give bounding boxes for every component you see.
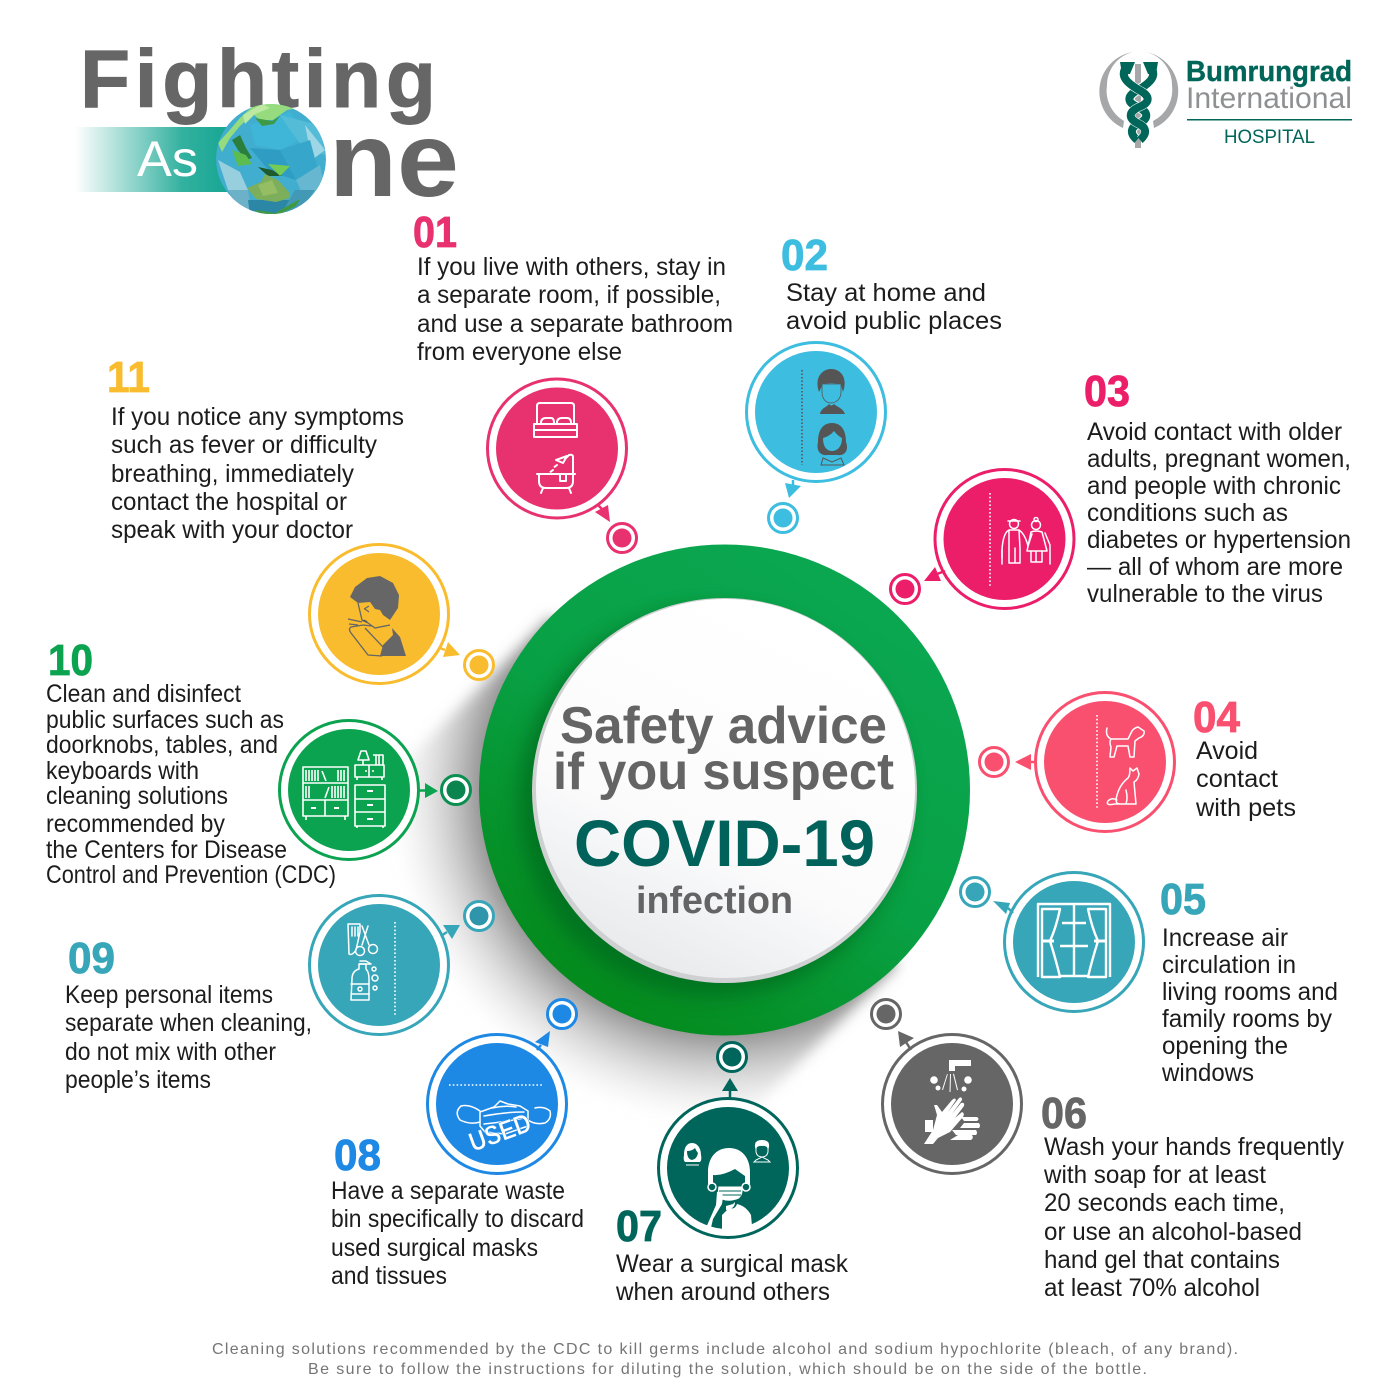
divider bbox=[1096, 715, 1098, 808]
bubble 02 bbox=[746, 342, 886, 482]
node 05 bbox=[960, 878, 990, 906]
text 11 bbox=[111, 403, 404, 544]
icon: coughing boy bbox=[348, 576, 406, 656]
label: USED: USED bbox=[465, 1108, 535, 1158]
logo: Bumrungrad International Hospital: HOSPITAL bbox=[1224, 127, 1315, 148]
node 10 bbox=[442, 776, 470, 804]
text 06: with soap for at least bbox=[1043, 1161, 1266, 1189]
center heading: if you suspect bbox=[553, 743, 894, 801]
text 05 bbox=[1161, 924, 1338, 1087]
divider bbox=[394, 922, 396, 1016]
text 07: when around others bbox=[615, 1278, 830, 1306]
number 05: 05 bbox=[1160, 875, 1206, 924]
text 05: windows bbox=[1161, 1059, 1254, 1087]
text 06: or use an alcohol-based bbox=[1044, 1218, 1302, 1246]
icon: comb and scissors bbox=[348, 924, 378, 956]
text 11: such as fever or difficulty bbox=[111, 431, 377, 459]
arrow 04 bbox=[1015, 754, 1036, 770]
item 07: surgical mask bbox=[615, 1042, 848, 1306]
arrow 09 bbox=[441, 925, 460, 939]
text 09: separate when cleaning, bbox=[65, 1009, 312, 1037]
bubble 08 bbox=[428, 1034, 566, 1174]
icon: man bbox=[817, 369, 845, 414]
logo: Bumrungrad International Hospital: International bbox=[1186, 82, 1352, 115]
text 11: breathing, immediately bbox=[111, 460, 354, 488]
arrow 03 bbox=[924, 567, 945, 581]
number 01: 01 bbox=[413, 208, 457, 257]
arrow 10 bbox=[419, 783, 438, 798]
text 05: family rooms by bbox=[1162, 1005, 1332, 1033]
text 04 bbox=[1195, 737, 1296, 822]
number 06: 06 bbox=[1041, 1089, 1087, 1138]
node 02 bbox=[768, 504, 798, 532]
item 01: separate room bbox=[413, 208, 733, 552]
text 11: If you notice any symptoms bbox=[111, 403, 404, 431]
footnote: Cleaning solutions recommended by the CDC to kill germs include alcohol and sodium hypochlorite (bleach, of any brand). bbox=[212, 1341, 1238, 1358]
icon: used mask bbox=[457, 1101, 550, 1134]
text 01: from everyone else bbox=[417, 338, 622, 366]
item 04: avoid pets bbox=[980, 692, 1296, 832]
icon: drawers bbox=[355, 785, 385, 828]
number 08: 08 bbox=[334, 1131, 381, 1180]
text 10: cleaning solutions bbox=[46, 782, 228, 810]
icon: dog bbox=[1106, 727, 1144, 757]
number 04: 04 bbox=[1193, 693, 1240, 742]
node 11 bbox=[464, 650, 494, 680]
divider bbox=[801, 370, 803, 465]
item 03: avoid vulnerable contact bbox=[890, 367, 1351, 608]
text 05: opening the bbox=[1162, 1032, 1288, 1060]
text 08: Have a separate waste bbox=[331, 1177, 565, 1205]
text 06: Wash your hands frequently bbox=[1044, 1133, 1344, 1161]
icon: bathtub bbox=[537, 455, 575, 493]
text 04: with pets bbox=[1195, 794, 1296, 822]
wordmark: Bumrungrad bbox=[1186, 56, 1352, 88]
green ring bbox=[479, 544, 970, 1036]
text 05: circulation in bbox=[1162, 951, 1296, 979]
text 03: diabetes or hypertension bbox=[1087, 526, 1351, 554]
bubble 11 bbox=[310, 544, 448, 684]
icon: bed bbox=[534, 403, 577, 437]
text 04: Avoid bbox=[1196, 737, 1258, 765]
text 08: and tissues bbox=[331, 1262, 447, 1290]
bubble 05 bbox=[1004, 872, 1144, 1012]
inner disc shadow bbox=[518, 609, 906, 997]
divider bbox=[989, 493, 991, 586]
item 08: waste bin bbox=[331, 1000, 584, 1290]
text 05: living rooms and bbox=[1162, 978, 1338, 1006]
number 09: 09 bbox=[68, 934, 115, 983]
bubble 09 bbox=[310, 896, 448, 1034]
center heading: COVID-19 bbox=[574, 806, 875, 880]
node 07 bbox=[718, 1042, 746, 1072]
text 10: Control and Prevention (CDC) bbox=[46, 861, 336, 889]
node 03 bbox=[890, 574, 920, 604]
text 03: and people with chronic bbox=[1087, 472, 1341, 500]
text 01: If you live with others, stay in bbox=[417, 253, 726, 281]
icon: spray bottle bbox=[351, 961, 378, 1000]
central drop shadow bbox=[291, 616, 898, 1224]
text 03: adults, pregnant women, bbox=[1087, 445, 1351, 473]
bubble 06 bbox=[882, 1034, 1022, 1174]
item 05: air circulation bbox=[960, 872, 1338, 1087]
footnote bbox=[212, 1341, 1238, 1378]
number 11: 11 bbox=[107, 353, 150, 402]
number 07: 07 bbox=[616, 1202, 662, 1251]
text 09: people’s items bbox=[65, 1066, 211, 1094]
icon: cabinet and lamp bbox=[355, 751, 384, 780]
icon: faucet and washing hands bbox=[924, 1060, 980, 1144]
icon: elderly couple bbox=[1002, 518, 1050, 564]
arrow 06 bbox=[898, 1031, 914, 1050]
text 10: keyboards with bbox=[46, 757, 199, 785]
item 11: symptoms bbox=[107, 353, 494, 684]
text 06 bbox=[1043, 1133, 1344, 1302]
icon: man head bbox=[754, 1140, 770, 1162]
center badge bbox=[479, 544, 970, 1036]
teal band bbox=[75, 127, 240, 192]
item 06: wash hands bbox=[872, 1000, 1344, 1302]
number 10: 10 bbox=[48, 636, 93, 685]
text 08: bin specifically to discard bbox=[331, 1205, 584, 1233]
logo: Bumrungrad International Hospital bbox=[1099, 52, 1352, 148]
footnote: Be sure to follow the instructions for diluting the solution, which should be on the side of the bottle. bbox=[308, 1361, 1147, 1378]
text 11: speak with your doctor bbox=[111, 516, 353, 544]
text 01: and use a separate bathroom bbox=[417, 310, 733, 338]
divider bbox=[449, 1084, 544, 1086]
heading word: As: As bbox=[137, 131, 198, 187]
item 09: separate personal items bbox=[65, 896, 494, 1094]
text 10: public surfaces such as bbox=[46, 706, 284, 734]
text 09 bbox=[65, 981, 312, 1094]
icon: open window with curtains bbox=[1038, 904, 1110, 977]
text 06: hand gel that contains bbox=[1044, 1246, 1280, 1274]
text 11: contact the hospital or bbox=[111, 488, 347, 516]
text 02: Stay at home and bbox=[786, 279, 986, 307]
text 03: vulnerable to the virus bbox=[1087, 580, 1323, 608]
white disc bbox=[536, 599, 915, 978]
text 08 bbox=[331, 1177, 584, 1290]
text 01: a separate room, if possible, bbox=[417, 281, 721, 309]
number 02: 02 bbox=[781, 231, 828, 280]
text 10: the Centers for Disease bbox=[46, 836, 287, 864]
text 01 bbox=[417, 253, 733, 366]
icon: people in mask bbox=[705, 1148, 752, 1232]
disc rim bbox=[532, 598, 917, 983]
center heading bbox=[553, 697, 894, 922]
text 07: Wear a surgical mask bbox=[616, 1250, 848, 1278]
node 06 bbox=[872, 1000, 900, 1028]
item 10: clean surfaces bbox=[46, 636, 470, 889]
arrow 01 bbox=[595, 505, 610, 522]
center heading: infection bbox=[636, 880, 793, 922]
text 09: Keep personal items bbox=[65, 981, 273, 1009]
text 10: Clean and disinfect bbox=[46, 680, 241, 708]
text 10 bbox=[46, 680, 336, 889]
icon: woman head bbox=[684, 1143, 701, 1165]
node 04 bbox=[980, 748, 1008, 776]
text 06: at least 70% alcohol bbox=[1044, 1274, 1260, 1302]
bubble 07 bbox=[658, 1098, 798, 1238]
icon: low-poly globe bbox=[216, 103, 326, 216]
text 03: — all of whom are more bbox=[1087, 553, 1343, 581]
bubble 01 bbox=[488, 379, 626, 518]
icon: cat bbox=[1107, 768, 1139, 805]
text 03: conditions such as bbox=[1087, 499, 1288, 527]
icon: bookshelf bbox=[303, 767, 348, 820]
center heading: Safety advice bbox=[560, 697, 887, 755]
title: Fighting As One bbox=[80, 47, 456, 214]
icon: caduceus bbox=[1099, 52, 1178, 148]
item 02: stay at home bbox=[746, 231, 1002, 532]
arrow 05 bbox=[993, 901, 1013, 914]
text 02: avoid public places bbox=[786, 307, 1002, 335]
text 03 bbox=[1087, 418, 1351, 608]
text 08: used surgical masks bbox=[331, 1234, 538, 1262]
node 08 bbox=[548, 1000, 576, 1028]
heading word: Fighting: Fighting bbox=[80, 34, 436, 125]
arrow 11 bbox=[440, 642, 460, 657]
arrow 08 bbox=[535, 1031, 550, 1050]
icon: woman bbox=[817, 423, 847, 465]
text 06: 20 seconds each time, bbox=[1044, 1189, 1285, 1217]
node 01 bbox=[608, 524, 636, 552]
bubble 10 bbox=[280, 720, 418, 860]
arrow 07 bbox=[722, 1078, 738, 1098]
text 07 bbox=[615, 1250, 848, 1306]
text 03: Avoid contact with older bbox=[1087, 418, 1342, 446]
heading word: ne: ne bbox=[329, 101, 459, 219]
text 04: contact bbox=[1196, 765, 1278, 793]
bubble 04 bbox=[1036, 692, 1174, 832]
text 10: doorknobs, tables, and bbox=[46, 731, 278, 759]
node 09 bbox=[464, 902, 494, 930]
text 05: Increase air bbox=[1162, 924, 1288, 952]
arrow 02 bbox=[785, 480, 801, 498]
bubble 03 bbox=[935, 470, 1074, 608]
text 10: recommended by bbox=[46, 810, 225, 838]
number 03: 03 bbox=[1084, 367, 1130, 416]
text 02 bbox=[786, 279, 1002, 335]
text 09: do not mix with other bbox=[65, 1038, 276, 1066]
